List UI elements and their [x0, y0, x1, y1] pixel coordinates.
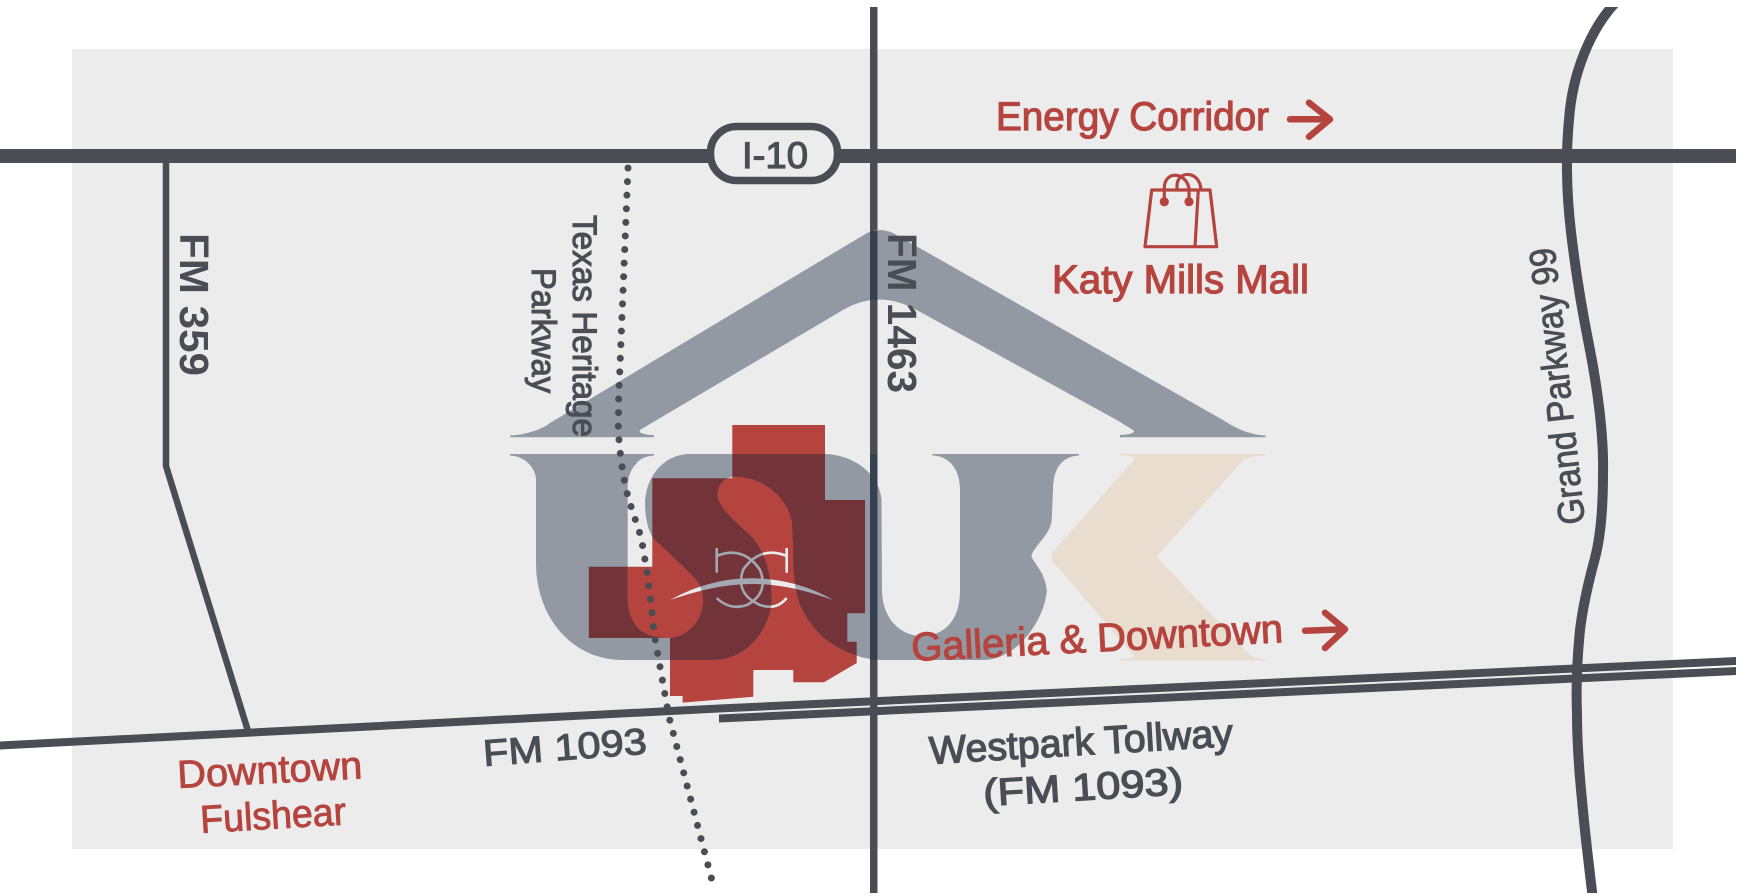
road: FM 1093 and Westpark Tollway — [0, 657, 1736, 750]
label: FM 1463: FM 1463 — [879, 233, 925, 393]
label: Downtown Fulshear: Downtown — [176, 744, 363, 797]
road: FM 1463 — [870, 7, 878, 893]
label: Texas Heritage Parkway: Texas Heritage — [565, 215, 603, 437]
label: Galleria and Downtown: Galleria & Downtown — [910, 607, 1284, 670]
I-10 shield — [710, 126, 838, 180]
label: Grand Parkway 99: Grand Parkway 99 — [1522, 246, 1593, 527]
road: Grand Parkway 99 — [1567, 0, 1618, 896]
logo: overlap of letters and footprint — [588, 454, 865, 660]
I-10 shield: I-10 — [742, 135, 808, 176]
label: Katy Mills Mall: Katy Mills Mall — [1052, 258, 1309, 302]
label: Texas Heritage Parkway: Parkway — [524, 268, 562, 393]
logo: monogram knocked out of footprint — [670, 548, 833, 607]
label: FM 359: FM 359 — [171, 233, 217, 376]
logo: letter K — [1051, 454, 1266, 660]
road: Texas Heritage Parkway dotted — [618, 168, 714, 888]
label: Downtown Fulshear: Fulshear — [199, 790, 347, 842]
icon: shopping bag — [1145, 174, 1217, 247]
label: FM 1093: FM 1093 — [482, 721, 648, 774]
logo: monogram over letters — [700, 548, 833, 608]
arrow: Galleria and Downtown — [1305, 613, 1345, 648]
arrow: Energy Corridor — [1290, 103, 1330, 137]
logo: building footprint — [589, 425, 865, 703]
label: Texas Heritage Parkway — [524, 215, 603, 437]
logo: roof — [510, 230, 1266, 437]
logo: letters U S U — [510, 454, 1079, 660]
label: Energy Corridor: Energy Corridor — [996, 95, 1269, 139]
label: Westpark Tollway: (FM 1093) — [982, 761, 1184, 815]
road: FM 359 — [166, 156, 248, 731]
label: Westpark Tollway: Westpark Tollway — [928, 712, 1234, 773]
label: Downtown Fulshear — [176, 744, 363, 842]
road: I-10 — [0, 149, 1736, 163]
label: Westpark Tollway — [928, 712, 1234, 815]
road: FM 1463 over logo — [870, 231, 878, 660]
